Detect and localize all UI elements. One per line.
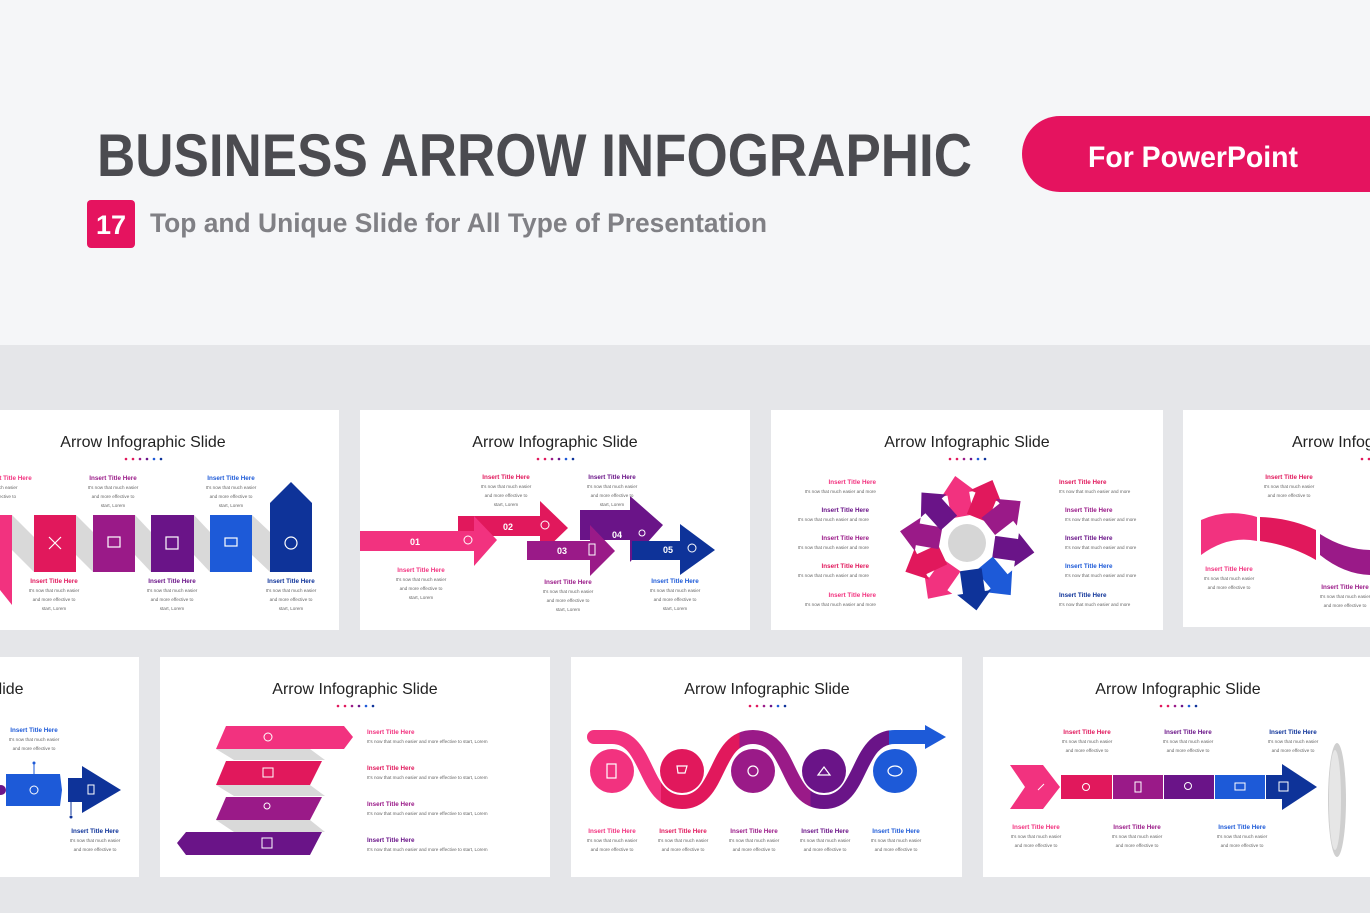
slide 6: stacked chevrons: It's now that much easier and more effective to start, Lorem bbox=[367, 811, 488, 816]
slide 3: radial arrows: Insert Title Here bbox=[822, 507, 869, 514]
slide 5: blue arrows (cropped) bbox=[0, 657, 139, 877]
slide 2: overlapping arrows: 04 bbox=[612, 530, 622, 540]
slide 3: radial arrows: It's now that much easier and more bbox=[1065, 545, 1137, 550]
slide 1: stepped boxes: It's now that much easier bbox=[88, 485, 139, 490]
slide 4: curved band: It's now that much easier bbox=[1264, 484, 1315, 489]
slide 3: radial arrows: Insert Title Here bbox=[1065, 535, 1113, 542]
slide 8: segmented arrow to target: Insert Title Here bbox=[1113, 824, 1161, 831]
slide 6: stacked chevrons: It's now that much easier and more effective to start, Lorem bbox=[367, 739, 488, 744]
slide 2: overlapping arrows: start, Lorem bbox=[600, 502, 624, 507]
title: BUSINESS ARROW INFOGRAPHIC bbox=[97, 122, 972, 189]
slide 8: segmented arrow to target: Insert Title Here bbox=[1269, 729, 1317, 736]
slide 3: radial arrows: Insert Title Here bbox=[1059, 592, 1107, 599]
slide 1: stepped boxes: start, Lorem bbox=[160, 606, 184, 611]
pill: For PowerPoint: For PowerPoint bbox=[1088, 141, 1298, 174]
slide 2: overlapping arrows: and more effective to bbox=[654, 597, 697, 602]
slide 1: stepped boxes: start, Lorem bbox=[42, 606, 66, 611]
slide 8: segmented arrow to target: It's now that much easier bbox=[1112, 834, 1163, 839]
pill: For PowerPoint bbox=[1022, 116, 1370, 192]
slide 7: wave with circles: Insert Title Here bbox=[872, 828, 920, 835]
slide 3: radial arrows: It's now that much easier and more bbox=[1059, 602, 1131, 607]
slide 2: overlapping arrows: It's now that much easier bbox=[543, 589, 594, 594]
slide 1: stepped boxes: Arrow Infographic Slide bbox=[60, 434, 226, 451]
slide 2: overlapping arrows: Insert Title Here bbox=[397, 567, 445, 574]
slide 3: radial arrows: Insert Title Here bbox=[822, 535, 869, 542]
slide 8: segmented arrow to target: Arrow Infographic Slide bbox=[1095, 681, 1261, 698]
slide 3: radial arrows: It's now that much easier and more bbox=[1065, 573, 1137, 578]
slide 8: segmented arrow to target: Insert Title Here bbox=[1012, 824, 1060, 831]
slide 4: curved band: Insert Title Here bbox=[1321, 584, 1369, 591]
slide 3: radial arrows: It's now that much easier and more bbox=[805, 602, 876, 607]
slide 7: wave with circles: Insert Title Here bbox=[588, 828, 636, 835]
slide 1: stepped boxes: It's now that much easier bbox=[266, 588, 317, 593]
slide 1: stepped boxes: Insert Title Here bbox=[30, 578, 78, 585]
slide 2: overlapping arrows: Insert Title Here bbox=[588, 474, 636, 481]
slide 6: stacked chevrons: It's now that much easier and more effective to start, Lorem bbox=[367, 775, 488, 780]
slide 3: radial arrows: Insert Title Here bbox=[829, 479, 876, 486]
slide 1: stepped boxes: start, Lorem bbox=[219, 503, 243, 508]
slide 4: curved band: Insert Title Here bbox=[1205, 566, 1253, 573]
slide 5: blue arrows (cropped): Insert Title Here bbox=[10, 727, 58, 734]
slide 4: curved band: It's now that much easier bbox=[1204, 576, 1255, 581]
slide 2: overlapping arrows: It's now that much easier bbox=[481, 484, 532, 489]
slide 2: overlapping arrows: 01 bbox=[410, 537, 420, 547]
slide 3: radial arrows bbox=[771, 410, 1163, 630]
slide 6: stacked chevrons: Insert Title Here bbox=[367, 729, 415, 736]
slide 3: radial arrows: Insert Title Here bbox=[1065, 507, 1113, 514]
slide 1: stepped boxes: and more effective to bbox=[151, 597, 194, 602]
slide 5: blue arrows (cropped): and more effective to bbox=[13, 746, 56, 751]
slide 6: stacked chevrons: Insert Title Here bbox=[367, 837, 415, 844]
slide 1: stepped boxes: and more effective to bbox=[33, 597, 76, 602]
slide 3: radial arrows: It's now that much easier and more bbox=[1065, 517, 1137, 522]
slide 2: overlapping arrows: Arrow Infographic Slide bbox=[472, 434, 638, 451]
slide 2: overlapping arrows: Insert Title Here bbox=[651, 578, 699, 585]
slide 1: stepped boxes: It's now that much easier bbox=[206, 485, 257, 490]
slide 3: radial arrows: Arrow Infographic Slide bbox=[884, 434, 1050, 451]
slide 2: overlapping arrows: start, Lorem bbox=[409, 595, 433, 600]
slide 8: segmented arrow to target: and more effective to bbox=[1066, 748, 1109, 753]
slide 3: radial arrows: It's now that much easier and more bbox=[1059, 489, 1131, 494]
subtitle: Top and Unique Slide for All Type of Presentation bbox=[150, 208, 767, 238]
slide 1: stepped boxes: It's now that much easier bbox=[147, 588, 198, 593]
slide 1: stepped boxes: Insert Title Here bbox=[148, 578, 196, 585]
slide 2: overlapping arrows: start, Lorem bbox=[494, 502, 518, 507]
slide 8: segmented arrow to target: It's now that much easier bbox=[1268, 739, 1319, 744]
slide 7: wave with circles bbox=[571, 657, 962, 877]
slide 8: segmented arrow to target: and more effective to bbox=[1221, 843, 1264, 848]
slide 1: stepped boxes: Insert Title Here bbox=[207, 475, 255, 482]
slide 4: curved band bbox=[1183, 410, 1370, 627]
slide 7: wave with circles: Arrow Infographic Slide bbox=[684, 681, 850, 698]
slide 1: stepped boxes: Insert Title Here bbox=[267, 578, 315, 585]
slide 7: wave with circles: It's now that much easier bbox=[800, 838, 851, 843]
slide 2: overlapping arrows: 05 bbox=[663, 545, 673, 555]
badge: 17: 17 bbox=[96, 210, 126, 240]
slide 5: blue arrows (cropped): Insert Title Here bbox=[71, 828, 119, 835]
slide 2: overlapping arrows: start, Lorem bbox=[556, 607, 580, 612]
slide 7: wave with circles: and more effective to bbox=[875, 847, 918, 852]
slide 7: wave with circles: and more effective to bbox=[804, 847, 847, 852]
slide 3: radial arrows: Insert Title Here bbox=[822, 563, 869, 570]
slide 8: segmented arrow to target: and more effective to bbox=[1167, 748, 1210, 753]
slide 2: overlapping arrows: and more effective to bbox=[400, 586, 443, 591]
slide 2: overlapping arrows: Insert Title Here bbox=[482, 474, 530, 481]
slide 2: overlapping arrows: Insert Title Here bbox=[544, 579, 592, 586]
slide 6: stacked chevrons: Insert Title Here bbox=[367, 801, 415, 808]
slide 8: segmented arrow to target: It's now that much easier bbox=[1217, 834, 1268, 839]
slide 8: segmented arrow to target: Insert Title Here bbox=[1164, 729, 1212, 736]
slide 1: stepped boxes: Insert Title Here bbox=[89, 475, 137, 482]
slide 7: wave with circles: and more effective to bbox=[662, 847, 705, 852]
slide 2: overlapping arrows bbox=[360, 410, 750, 630]
slide 8: segmented arrow to target: Insert Title Here bbox=[1063, 729, 1111, 736]
slide 1: stepped boxes: and more effective to bbox=[210, 494, 253, 499]
slide 1: stepped boxes: It's now that much easier bbox=[29, 588, 80, 593]
slide 3: radial arrows: It's now that much easier and more bbox=[798, 573, 869, 578]
slide 5: blue arrows (cropped): and more effective to bbox=[74, 847, 117, 852]
slide 4: curved band: Insert Title Here bbox=[1265, 474, 1313, 481]
slide 8: segmented arrow to target: and more effective to bbox=[1116, 843, 1159, 848]
slide 3: radial arrows: Insert Title Here bbox=[1065, 563, 1113, 570]
slide 3: radial arrows: It's now that much easier and more bbox=[805, 489, 876, 494]
slide 8: segmented arrow to target: It's now that much easier bbox=[1163, 739, 1214, 744]
badge: 17 bbox=[87, 200, 135, 248]
slide 2: overlapping arrows: and more effective to bbox=[547, 598, 590, 603]
slide 7: wave with circles: Insert Title Here bbox=[659, 828, 707, 835]
slide 2: overlapping arrows: and more effective to bbox=[591, 493, 634, 498]
slide 6: stacked chevrons: Insert Title Here bbox=[367, 765, 415, 772]
slide 8: segmented arrow to target: It's now that much easier bbox=[1062, 739, 1113, 744]
slide 7: wave with circles: It's now that much easier bbox=[729, 838, 780, 843]
slide 5: blue arrows (cropped): It's now that much easier bbox=[70, 838, 121, 843]
slide 7: wave with circles: Insert Title Here bbox=[801, 828, 849, 835]
slide 8: segmented arrow to target: and more effective to bbox=[1272, 748, 1315, 753]
slide 8: segmented arrow to target: Insert Title Here bbox=[1218, 824, 1266, 831]
slide 7: wave with circles: It's now that much easier bbox=[871, 838, 922, 843]
slide 4: curved band: and more effective to bbox=[1324, 603, 1367, 608]
slide 6: stacked chevrons: Arrow Infographic Slide bbox=[272, 681, 438, 698]
slide 6: stacked chevrons bbox=[160, 657, 550, 877]
slide 2: overlapping arrows: It's now that much easier bbox=[650, 588, 701, 593]
slide 8: segmented arrow to target: and more effective to bbox=[1015, 843, 1058, 848]
slide 2: overlapping arrows: It's now that much easier bbox=[396, 577, 447, 582]
slide 4: curved band: It's now that much easier bbox=[1320, 594, 1370, 599]
slide 8: segmented arrow to target bbox=[983, 657, 1370, 877]
slide 4: curved band: and more effective to bbox=[1268, 493, 1311, 498]
slide 1: stepped boxes: start, Lorem bbox=[101, 503, 125, 508]
slide 5: blue arrows (cropped): It's now that much easier bbox=[9, 737, 60, 742]
slide 7: wave with circles: It's now that much easier bbox=[587, 838, 638, 843]
slide 1: stepped boxes bbox=[0, 410, 339, 630]
slide 2: overlapping arrows: 03 bbox=[557, 546, 567, 556]
slide 1: stepped boxes: start, Lorem bbox=[279, 606, 303, 611]
slide 7: wave with circles: Insert Title Here bbox=[730, 828, 778, 835]
slide 2: overlapping arrows: 02 bbox=[503, 522, 513, 532]
slide 2: overlapping arrows: It's now that much easier bbox=[587, 484, 638, 489]
slide 3: radial arrows: Insert Title Here bbox=[829, 592, 876, 599]
slide 7: wave with circles: and more effective to bbox=[591, 847, 634, 852]
slide 4: curved band: and more effective to bbox=[1208, 585, 1251, 590]
slide 3: radial arrows: It's now that much easier and more bbox=[798, 517, 869, 522]
slide 2: overlapping arrows: and more effective to bbox=[485, 493, 528, 498]
slide 3: radial arrows: It's now that much easier and more bbox=[798, 545, 869, 550]
slide 1: stepped boxes: and more effective to bbox=[92, 494, 135, 499]
slide 7: wave with circles: and more effective to bbox=[733, 847, 776, 852]
slide 2: overlapping arrows: start, Lorem bbox=[663, 606, 687, 611]
slide 7: wave with circles: It's now that much easier bbox=[658, 838, 709, 843]
slide 3: radial arrows: Insert Title Here bbox=[1059, 479, 1107, 486]
slide 8: segmented arrow to target: It's now that much easier bbox=[1011, 834, 1062, 839]
slide 1: stepped boxes: and more effective to bbox=[270, 597, 313, 602]
slide 6: stacked chevrons: It's now that much easier and more effective to start, Lorem bbox=[367, 847, 488, 852]
